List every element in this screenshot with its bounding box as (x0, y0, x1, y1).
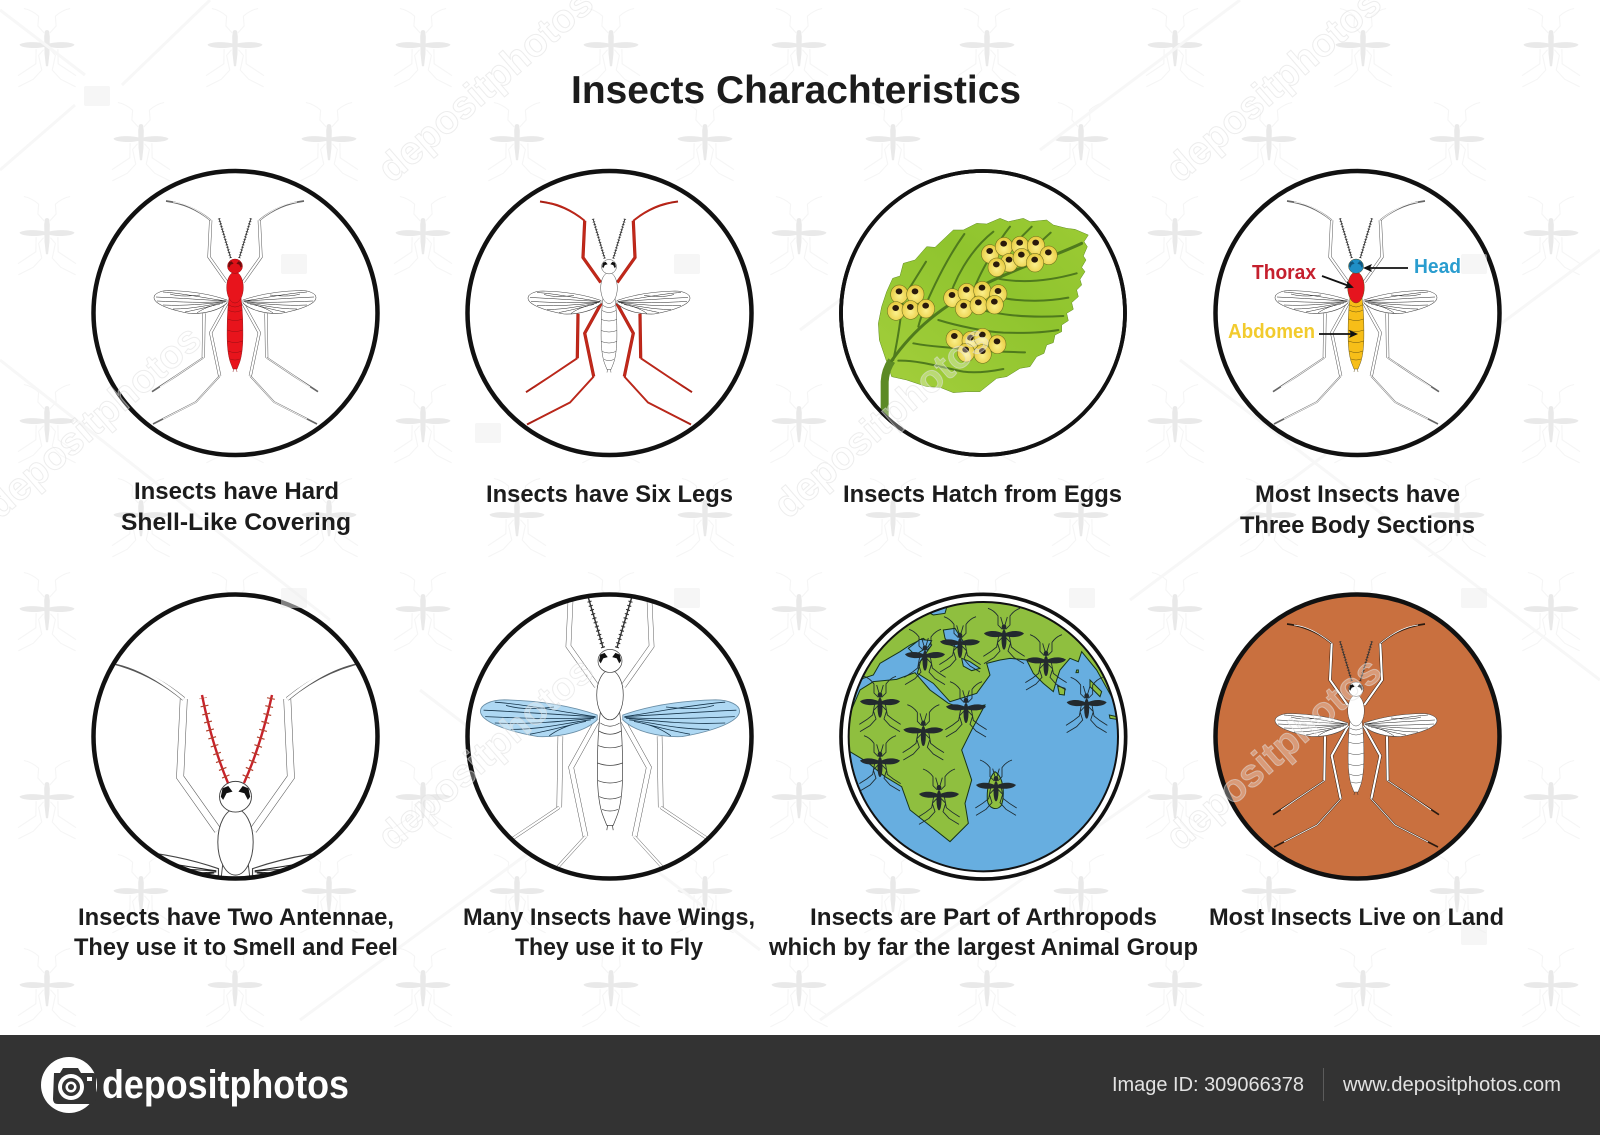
caption: hard shell: Insects have Hard (134, 478, 339, 505)
caption: hard shell: Shell-Like Covering (121, 509, 351, 536)
caption: land: Most Insects Live on Land (1209, 904, 1504, 931)
caption: arthropods: which by far the largest Animal Group (768, 934, 1198, 961)
label: Abdomen: Abdomen (1228, 321, 1315, 343)
label: Head (1365, 256, 1461, 278)
icon: mosquito with blue wings (480, 598, 740, 868)
panel: hard shell covering (94, 171, 378, 536)
panel: three body sections (1216, 171, 1500, 539)
icon: mosquito with red legs (526, 202, 692, 424)
panel: arthropods globe (768, 594, 1198, 961)
icon: white mosquito on brown ground (1273, 624, 1439, 847)
icon: mosquito with red body (152, 201, 318, 424)
title: Insects Charachteristics (571, 69, 1021, 112)
watermark: camera icons (84, 86, 1487, 945)
caption: wings (463, 904, 755, 961)
icon: enlarged head with legs (115, 664, 356, 876)
caption: arthropods (768, 904, 1198, 961)
label: Thorax (1252, 262, 1352, 287)
caption: wings: They use it to Fly (515, 934, 704, 961)
icon: red antennae (202, 695, 272, 783)
panel: live on land (1209, 594, 1504, 931)
caption: arthropods: Insects are Part of Arthropods (810, 904, 1157, 931)
caption: antennae (74, 904, 398, 961)
watermark: diagonal text: depositphotos (1158, 649, 1390, 859)
panel: two antennae (74, 592, 396, 960)
caption: hard shell (121, 478, 351, 536)
caption: body sections: Most Insects have (1255, 481, 1460, 508)
watermark: diagonal text: depositphotos (766, 317, 998, 527)
label: Thorax: Thorax (1252, 262, 1316, 284)
icon: leaf with eggs (878, 218, 1088, 417)
website: www.depositphotos.com (1342, 1074, 1561, 1096)
caption: antennae: Insects have Two Antennae, (78, 904, 394, 931)
caption: wings: Many Insects have Wings, (463, 904, 755, 931)
caption: antennae: They use it to Smell and Feel (74, 934, 398, 961)
icon: mosquito with coloured body sections (1273, 201, 1439, 424)
panel: hatch from eggs (841, 171, 1125, 508)
caption: body sections (1240, 481, 1475, 539)
watermark: diagonal text: depositphotos (370, 649, 602, 859)
panel: wings (463, 557, 755, 961)
watermark: diagonal text (0, 0, 1390, 859)
icon: globe with mosquitoes (840, 594, 1126, 879)
caption: eggs: Insects Hatch from Eggs (843, 481, 1122, 508)
label: Head: Head (1414, 256, 1461, 278)
caption: six legs: Insects have Six Legs (486, 481, 733, 508)
image id: Image ID: 309066378 (1112, 1074, 1304, 1096)
panel: six legs (468, 171, 752, 508)
caption: body sections: Three Body Sections (1240, 512, 1475, 539)
icon: depositphotos camera logo (41, 1057, 97, 1113)
footer logo text: depositphotos (102, 1063, 349, 1107)
footer bar (0, 1035, 1600, 1135)
